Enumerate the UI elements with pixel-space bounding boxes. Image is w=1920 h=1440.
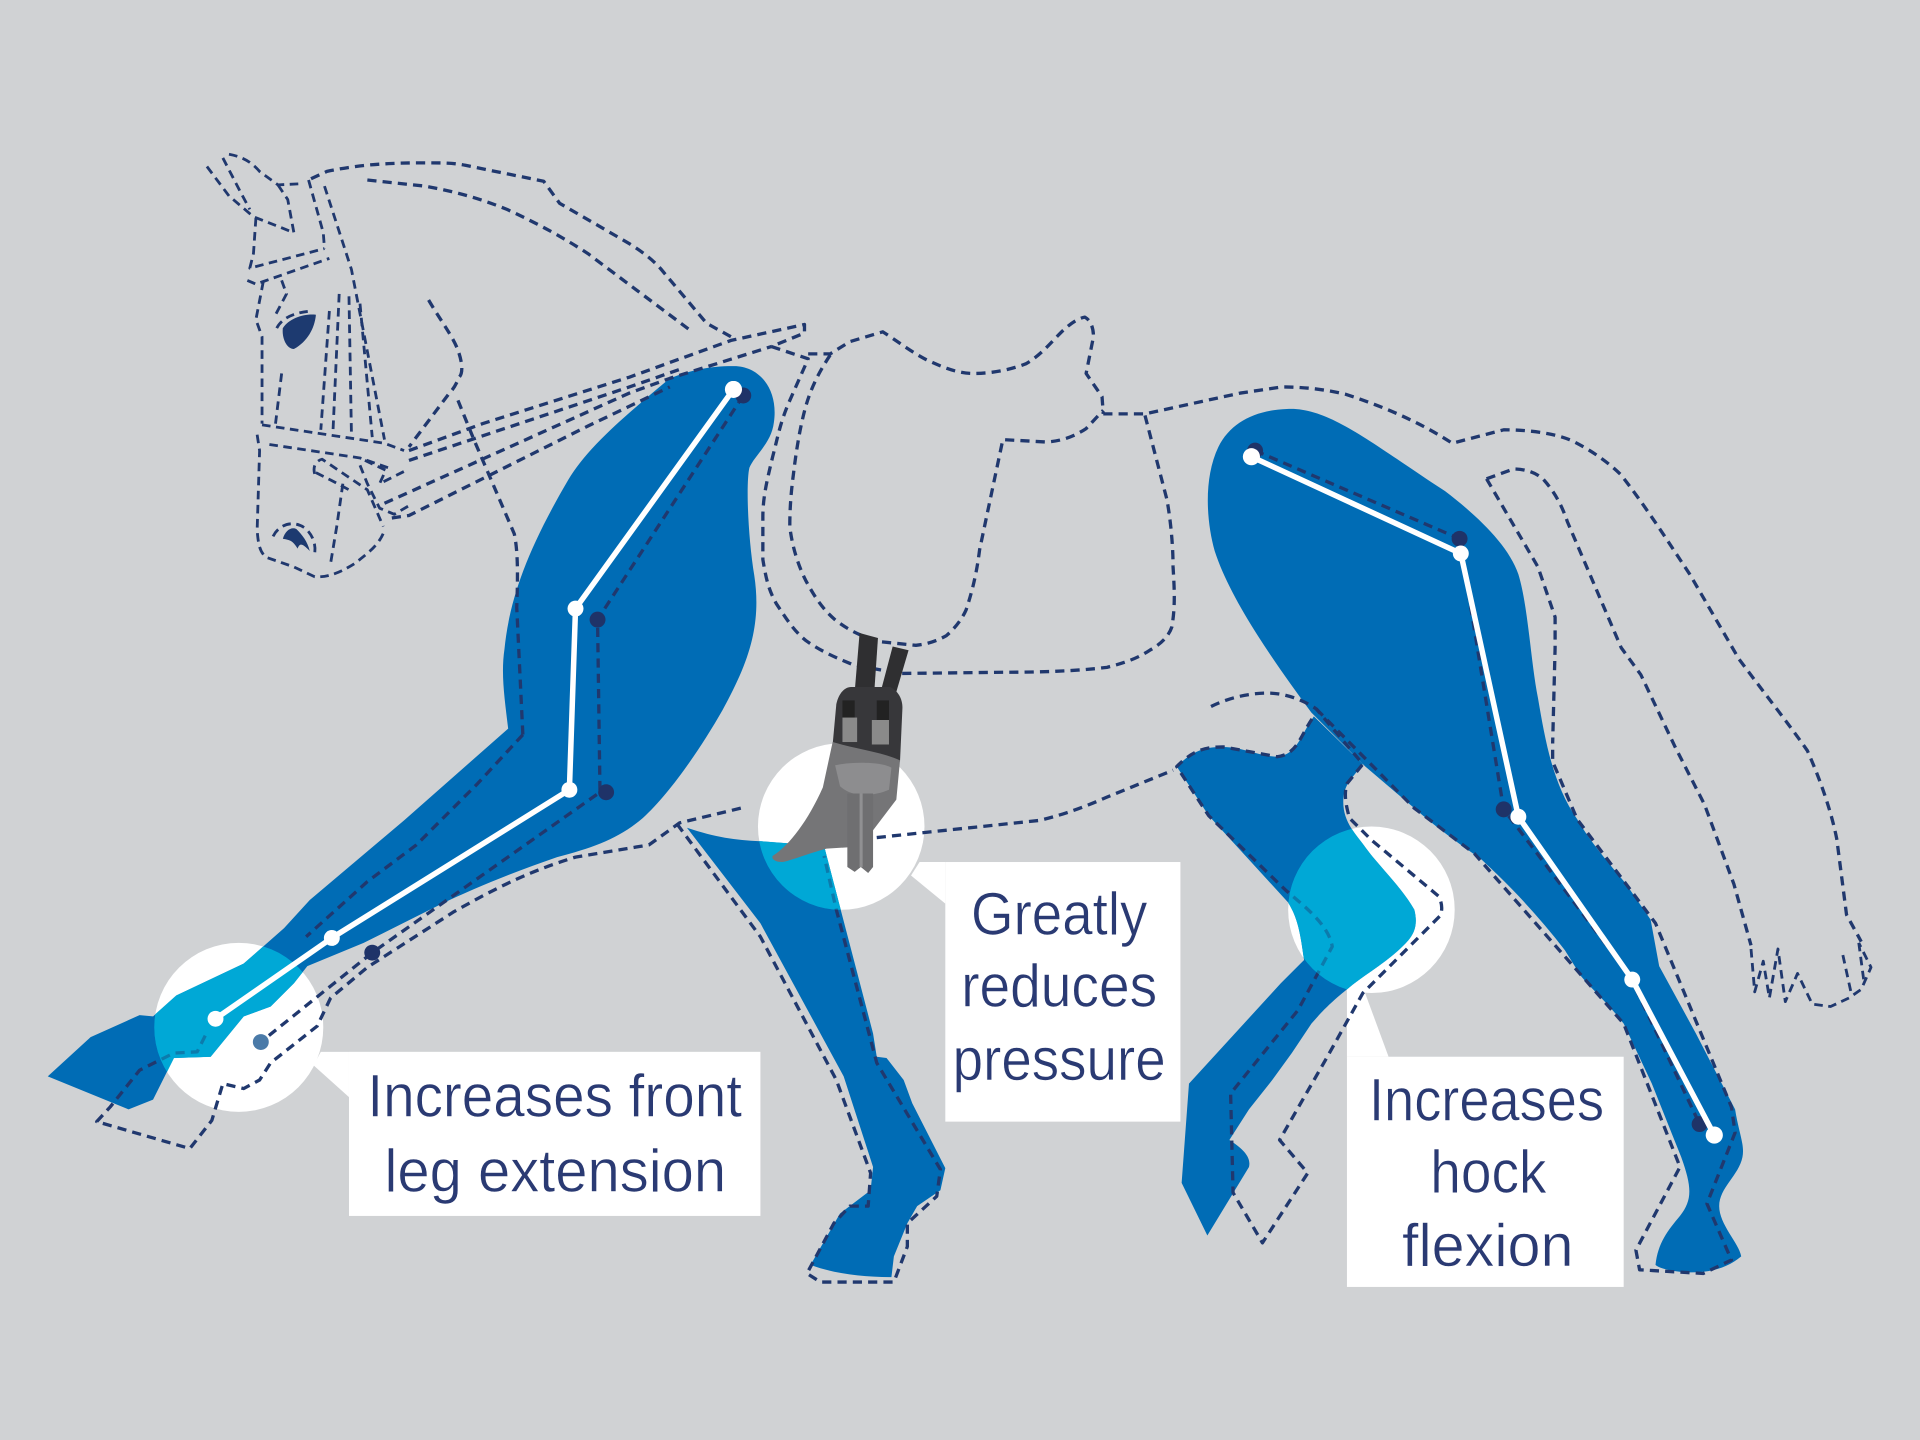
label: greatly reduces pressure — [953, 880, 1166, 1093]
label: increases hock flexion: hock — [1430, 1139, 1547, 1206]
skeleton: white front line — [208, 381, 742, 1027]
cyan highlights over dashes — [154, 829, 1416, 1072]
saddle and saddle pad outline — [763, 317, 1174, 673]
label: greatly reduces pressure: pressure — [953, 1026, 1166, 1093]
label: increases hock flexion: flexion — [1402, 1212, 1573, 1279]
hind standing leg outline — [1316, 709, 1735, 1273]
skeleton: previous position hind — [1247, 443, 1708, 1132]
label: increases hock flexion: Increases — [1369, 1066, 1604, 1133]
front standing leg outline — [677, 824, 940, 1282]
label: greatly reduces pressure: reduces — [961, 953, 1157, 1020]
skeleton: white hind line — [1243, 448, 1723, 1144]
back and tail outline — [877, 387, 1871, 1007]
callout: hock backing — [1288, 827, 1624, 1287]
blue leg: standing hind with hindquarter — [1208, 409, 1743, 1272]
hind flexed leg outline — [1177, 693, 1442, 1243]
blue leg: flexed hind — [1177, 716, 1416, 1236]
blue leg: front extended — [48, 366, 775, 1109]
horse head outline — [207, 154, 409, 577]
icon: stirrup — [772, 633, 909, 873]
icon: eye — [283, 315, 316, 349]
tail hair fringe — [1751, 943, 1871, 1007]
skeleton: previous position front — [253, 388, 751, 1050]
label: greatly reduces pressure: Greatly — [971, 880, 1147, 947]
callout: front leg backing — [154, 943, 760, 1216]
label: increases front leg extension: Increases front — [367, 1063, 742, 1130]
horse neck, reins and throat — [311, 163, 804, 735]
label: increases front leg extension — [367, 1063, 742, 1204]
label: increases hock flexion — [1369, 1066, 1604, 1279]
label: increases front leg extension: leg extension — [384, 1137, 726, 1204]
cyan highlights under dashes — [48, 366, 1416, 1277]
belly line — [877, 770, 1173, 838]
callout: pressure backing — [758, 743, 1180, 1122]
blue leg: front standing — [687, 828, 945, 1277]
icon: nostril — [283, 528, 310, 551]
front extended leg outline — [97, 735, 741, 1149]
